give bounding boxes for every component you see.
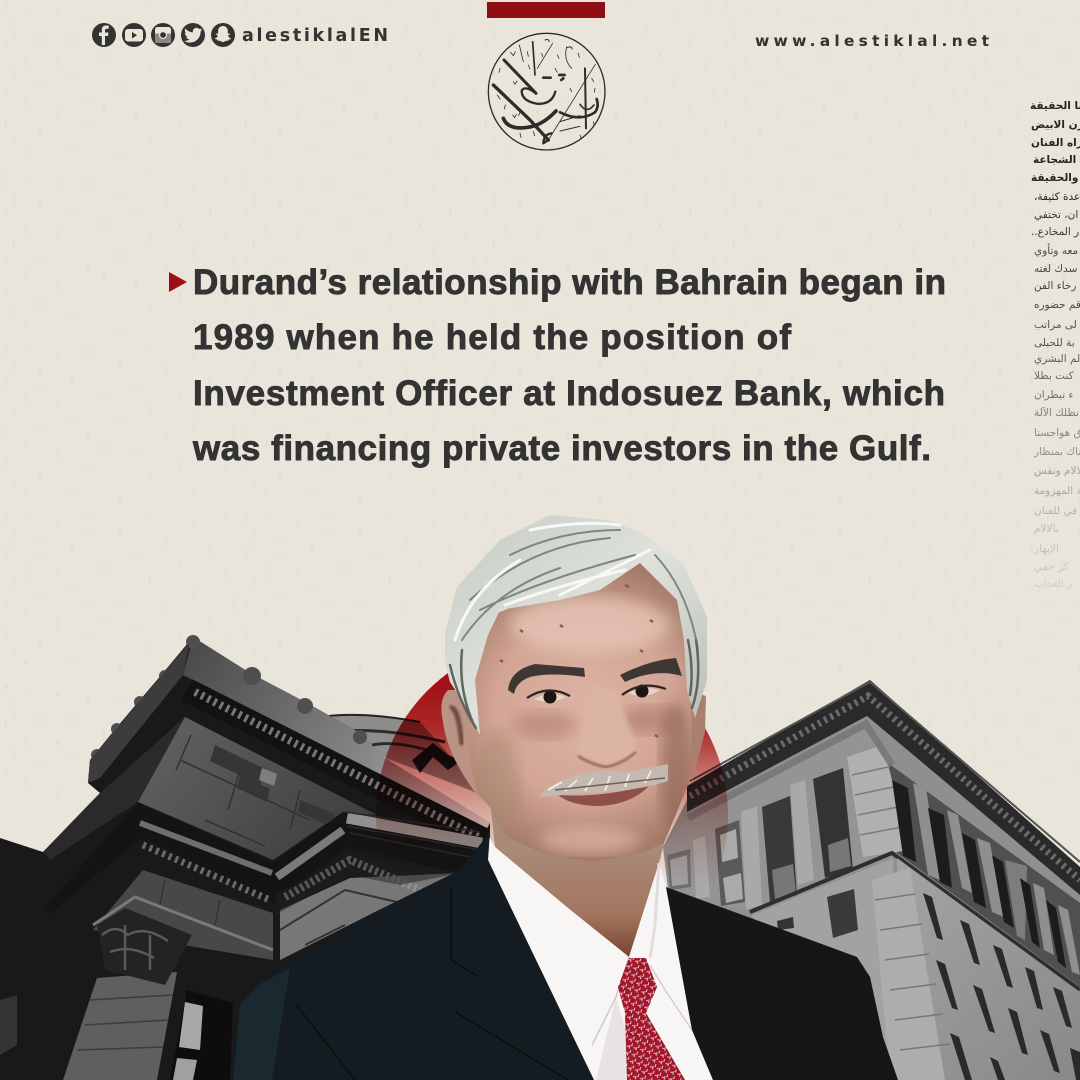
dentil band (187, 690, 484, 840)
newspaper column in Arabic: معه وتأوي (1034, 243, 1078, 257)
neck (490, 800, 670, 957)
corner quoin (847, 745, 910, 857)
eyebrows (508, 658, 682, 694)
suit left (233, 832, 594, 1080)
eye right (622, 684, 666, 698)
icon: twitter (181, 23, 205, 47)
headline text block: Durand’s relationship with Bahrain began in (193, 263, 946, 302)
newspaper column in Arabic: في للفنان (1034, 505, 1077, 517)
left building (0, 635, 490, 1080)
lower left facade and quoins (752, 858, 950, 1080)
headline text block: 1989 when he held the position of (193, 318, 791, 357)
right columns (913, 783, 1080, 975)
newspaper column in Arabic: بالالام (1034, 523, 1059, 535)
newspaper column in Arabic: ر المخادع.. (1031, 226, 1079, 238)
lower windows (923, 893, 1080, 1080)
newspaper column in Arabic: بة للحبلى (1034, 337, 1075, 349)
face (465, 555, 692, 862)
newspaper column in Arabic: كر خفي (1034, 561, 1069, 573)
shirt (488, 835, 713, 1080)
icon: snapchat (211, 23, 235, 47)
newspaper column in Arabic: ر العذاب (1034, 578, 1072, 590)
left facade (663, 727, 893, 910)
icon: instagram (151, 23, 175, 47)
nose (577, 685, 637, 767)
newspaper column in Arabic: ء نيطران (1034, 389, 1073, 401)
mouth (558, 785, 650, 806)
dome behind (320, 715, 490, 800)
newspaper column in Arabic: قم حضوره (1034, 299, 1080, 311)
mid cornice (43, 802, 483, 913)
silhouette base (0, 637, 490, 1080)
mustache (539, 764, 668, 797)
newspaper column in Arabic: نظلك الآلة (1034, 406, 1079, 419)
social handle: alestiklalEN (242, 26, 388, 46)
windows front (667, 768, 853, 906)
right ear (688, 690, 706, 782)
upper right windows (892, 780, 1066, 968)
suit right (666, 887, 898, 1080)
portrait of Durand (233, 515, 898, 1080)
newspaper column in Arabic: الشجاعة (1033, 154, 1076, 166)
eye left (527, 690, 570, 704)
icon: facebook (92, 23, 116, 47)
hair strands (450, 523, 698, 728)
bullet triangle (169, 272, 187, 292)
collar shading (592, 863, 692, 1080)
logo: calligraphy seal (488, 33, 605, 150)
right upper facade (888, 763, 1080, 987)
headline text block: Investment Officer at Indosuez Bank, which (193, 374, 945, 413)
top red bar (487, 2, 605, 18)
capital (97, 908, 192, 985)
newspaper column in Arabic: عدة كثيفة، (1034, 191, 1080, 203)
social icons row (92, 23, 235, 47)
roof side (88, 642, 190, 783)
window (170, 990, 233, 1080)
right stone corner (275, 855, 460, 960)
newspaper column in Arabic: لى مراتب (1034, 319, 1077, 331)
red circle tinting the buildings (376, 639, 728, 991)
right building (663, 680, 1080, 1080)
columns front (693, 780, 814, 910)
website address: www.alestiklal.net (755, 32, 990, 50)
column shaft (63, 972, 177, 1080)
lower right facade (897, 858, 1080, 1080)
icon: youtube (122, 23, 146, 47)
newspaper column in Arabic: رخاء الفن (1034, 280, 1076, 292)
left ear (441, 690, 495, 795)
headline text block: was financing private investors in the Gulf. (192, 429, 931, 468)
lower wall (93, 845, 273, 960)
newspaper column in Arabic: تاك بمنظار (1033, 446, 1080, 458)
tie (618, 958, 685, 1080)
stone wall block (138, 717, 377, 860)
roof top face (183, 637, 490, 834)
side wall (43, 717, 185, 860)
newspaper column in Arabic: كنت بطلا (1034, 370, 1074, 382)
headline text block (192, 263, 946, 468)
newspaper column in Arabic (1030, 100, 1080, 590)
left panels (0, 995, 17, 1055)
base (663, 680, 1080, 1080)
ledge (750, 853, 1080, 990)
hair (445, 515, 707, 735)
newspaper column in Arabic: ان، تختفي (1034, 209, 1078, 221)
roof cornice (687, 680, 1080, 895)
newspaper column in Arabic: سدك لغته (1034, 263, 1077, 275)
newspaper column in Arabic: الإبهار (1033, 543, 1059, 555)
inner pediment (412, 743, 458, 773)
face shading (476, 585, 692, 854)
roof ornaments (91, 635, 367, 761)
